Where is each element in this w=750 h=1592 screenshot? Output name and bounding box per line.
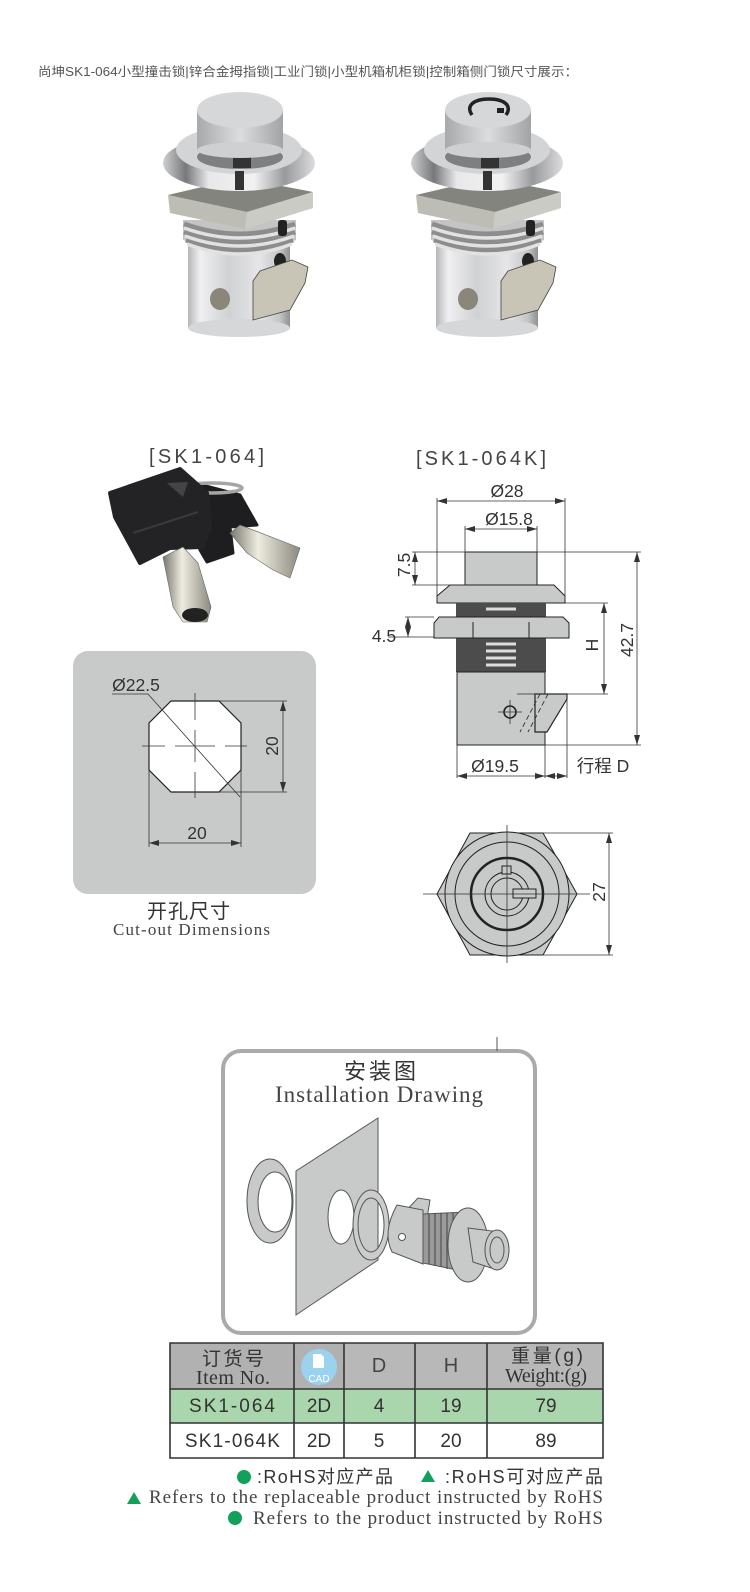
legend: RoHS replaceable: :RoHS可对应产品 xyxy=(445,1467,603,1487)
header: weight: 重量(g) xyxy=(511,1345,583,1367)
installation: panel plate xyxy=(296,1118,378,1315)
page intro text: 尚坤SK1-064小型撞击锁|锌合金拇指锁|工业门锁|小型机箱机柜锁|控制箱侧门锁尺寸展示： xyxy=(38,64,578,79)
row: SK1-064: 19 xyxy=(440,1396,462,1417)
legend xyxy=(127,1467,603,1529)
panel: installation drawing xyxy=(223,1037,535,1333)
installation: gasket xyxy=(353,1190,389,1260)
row: SK1-064: 4 xyxy=(374,1396,385,1417)
legend: compliant English: Refers to the product instructed by RoHS xyxy=(253,1508,603,1529)
caption: cut-out Chinese: 开孔尺寸 xyxy=(147,900,230,923)
technical drawing: top view xyxy=(423,825,613,963)
title: installation English: Installation Drawing xyxy=(275,1082,484,1107)
cut-out dimension lines xyxy=(112,693,287,847)
technical drawing: side view xyxy=(372,481,641,778)
row: SK1-064K: 20 xyxy=(440,1431,462,1452)
heading: SK1-064K: [SK1-064K] xyxy=(416,448,546,470)
label: diameter 22.5: Ø22.5 xyxy=(112,675,160,695)
row: SK1-064K: 2D xyxy=(307,1431,331,1452)
installation: hex nut xyxy=(247,1159,293,1243)
photo: SK1-064 thumb lock xyxy=(163,92,315,337)
photo: SK1-064K key lock xyxy=(411,92,563,337)
row: SK1-064 xyxy=(189,1396,557,1417)
row: SK1-064K: 5 xyxy=(374,1431,384,1452)
installation: lock assembly xyxy=(388,1198,509,1282)
cut-out hole xyxy=(149,701,241,792)
photo: black keys xyxy=(110,469,300,622)
caption: cut-out English: Cut-out Dimensions xyxy=(113,920,270,939)
label: diameter 15.8: Ø15.8 xyxy=(485,509,533,529)
label: width 20: 20 xyxy=(187,823,207,843)
label: diameter 19.5: Ø19.5 xyxy=(471,756,519,776)
label: 4.5: 4.5 xyxy=(372,626,396,646)
label: 42.7: 42.7 xyxy=(617,623,637,657)
header: weight English: Weight:(g) xyxy=(505,1365,587,1387)
label: height 20: 20 xyxy=(262,736,282,756)
legend: replaceable English: Refers to the replaceable product instructed by RoHS xyxy=(149,1487,603,1508)
legend: RoHS compliant: :RoHS对应产品 xyxy=(257,1467,393,1487)
title: installation Chinese: 安装图 xyxy=(344,1059,416,1084)
specification table xyxy=(170,1343,603,1458)
header: item number: 订货号 xyxy=(202,1348,264,1370)
label: 27: 27 xyxy=(589,882,609,902)
row: SK1-064: SK1-064 xyxy=(189,1396,277,1417)
icon: CAD badge: CAD xyxy=(308,1374,330,1385)
heading: SK1-064: [SK1-064] xyxy=(149,446,264,468)
row: SK1-064: 2D xyxy=(307,1396,331,1417)
row: SK1-064K: SK1-064K xyxy=(185,1431,281,1452)
header: D: D xyxy=(372,1355,386,1377)
row: SK1-064K xyxy=(185,1431,557,1452)
row: SK1-064K: 89 xyxy=(535,1431,557,1452)
header: H: H xyxy=(444,1355,458,1377)
label: diameter 28: Ø28 xyxy=(490,481,524,501)
row: SK1-064: 79 xyxy=(535,1396,557,1417)
label: H: H xyxy=(582,639,602,651)
panel: cut-out dimensions xyxy=(73,651,316,894)
label: travel D: 行程 D xyxy=(577,756,629,776)
icon: CAD badge xyxy=(301,1349,337,1385)
label: 7.5: 7.5 xyxy=(394,553,414,577)
header: item number English: Item No. xyxy=(196,1367,270,1389)
